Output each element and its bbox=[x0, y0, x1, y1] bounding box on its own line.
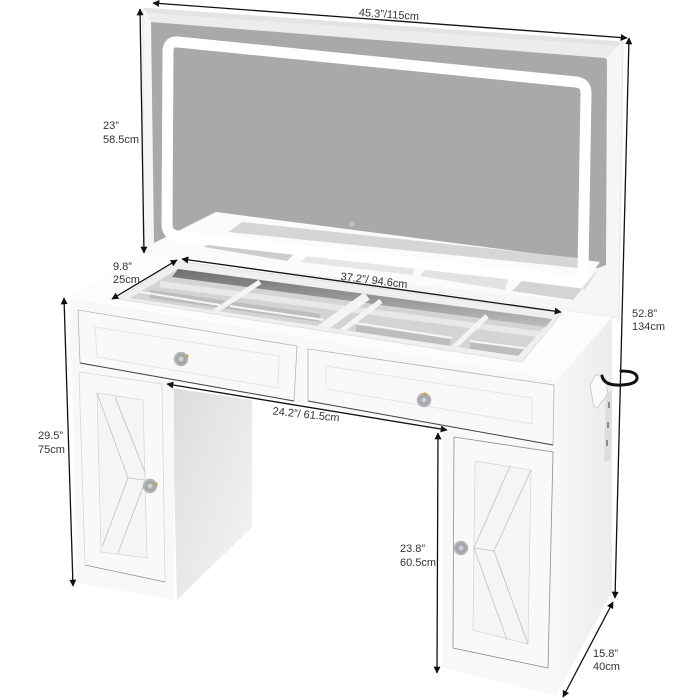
reflected tray slot two bbox=[301, 251, 418, 275]
left door panel bbox=[97, 393, 147, 558]
knob: left door bbox=[143, 479, 158, 493]
right door Y brace bbox=[474, 466, 531, 644]
tray interior bbox=[130, 269, 552, 356]
vanity desk bbox=[70, 252, 612, 696]
left drawer bbox=[78, 310, 297, 401]
left drawer shadow line bbox=[80, 363, 294, 401]
right drawer inset bbox=[326, 366, 532, 424]
label: desk height: 29.5” bbox=[38, 430, 63, 442]
left door bbox=[79, 372, 165, 582]
label: total height: 134cm bbox=[632, 321, 665, 333]
left door Y brace bbox=[97, 393, 145, 553]
tray back shadow bbox=[172, 269, 552, 327]
knob: right drawer bbox=[417, 392, 431, 407]
power socket strip bbox=[604, 390, 612, 462]
arrow: desk height bbox=[64, 298, 73, 586]
tray centre dividers bbox=[318, 296, 367, 331]
label: desk depth: 15.8” bbox=[593, 648, 618, 660]
arrow: mirror height bbox=[140, 9, 144, 253]
apron front bbox=[70, 298, 557, 447]
arrow: knee space height bbox=[437, 433, 438, 673]
left cabinet side bbox=[172, 388, 252, 600]
label: desk depth: 40cm bbox=[593, 661, 620, 673]
desk top surface bbox=[70, 252, 612, 380]
mirror frame bbox=[143, 8, 623, 318]
label: tray width: 37.2”/ 94.6cm bbox=[340, 271, 408, 291]
tray gray lower bands bbox=[150, 294, 535, 354]
tray compartment rails bbox=[135, 291, 537, 350]
right side face bbox=[556, 317, 612, 695]
arrow: total height bbox=[615, 38, 629, 598]
mirror frame top bevel bbox=[143, 8, 623, 46]
label: mirror height: 23” bbox=[103, 120, 119, 132]
label: knee space height: 60.5cm bbox=[400, 557, 436, 569]
touch switch bbox=[350, 222, 354, 226]
label: tray depth: 25cm bbox=[113, 274, 140, 286]
reflected tray slot one bbox=[204, 240, 297, 261]
arrow: knee space width bbox=[167, 384, 447, 430]
left cabinet plinth line bbox=[85, 565, 165, 582]
label: mirror width: 45.3”/115cm bbox=[358, 7, 419, 23]
left drawer inset bbox=[95, 327, 279, 388]
mirror frame upper strip bbox=[147, 13, 617, 58]
knob: right door bbox=[454, 541, 468, 555]
label: knee space height: 23.8” bbox=[400, 543, 425, 555]
left cabinet front bbox=[70, 298, 174, 600]
arrow: mirror width bbox=[153, 3, 627, 38]
arrow: desk depth bbox=[563, 602, 613, 697]
right drawer shadow line bbox=[308, 401, 553, 445]
right door bbox=[453, 437, 553, 668]
glass tray bbox=[118, 261, 562, 362]
LED light ring bbox=[167, 42, 586, 281]
reflected desk top bbox=[152, 212, 600, 301]
reflected tray slot three bbox=[420, 264, 510, 290]
label: total height: 52.8” bbox=[632, 308, 657, 320]
tray frame bbox=[118, 261, 562, 362]
socket details bbox=[607, 402, 609, 446]
side hook bracket bbox=[590, 375, 608, 408]
black hook ring bbox=[602, 371, 637, 385]
right door panel bbox=[473, 461, 531, 644]
tray short dividers bbox=[214, 282, 487, 350]
reflected tray back wall bbox=[228, 222, 578, 268]
right drawer bbox=[308, 349, 554, 445]
arrow: tray depth bbox=[112, 260, 177, 299]
knob: left drawer bbox=[174, 352, 189, 366]
tray reflection band bbox=[160, 284, 545, 335]
label: desk height: 75cm bbox=[38, 444, 65, 456]
label: tray depth: 9.8” bbox=[113, 261, 132, 273]
label: mirror height: 58.5cm bbox=[103, 134, 139, 146]
mirror glass bbox=[151, 22, 607, 268]
arrow: tray width bbox=[182, 259, 561, 312]
reflected tray slot four bbox=[512, 268, 599, 300]
label: knee space width: 24.2”/ 61.5cm bbox=[272, 406, 340, 424]
tray second centre divider bbox=[339, 301, 381, 333]
right cabinet front bbox=[443, 425, 558, 696]
mirror panel bbox=[143, 8, 623, 318]
